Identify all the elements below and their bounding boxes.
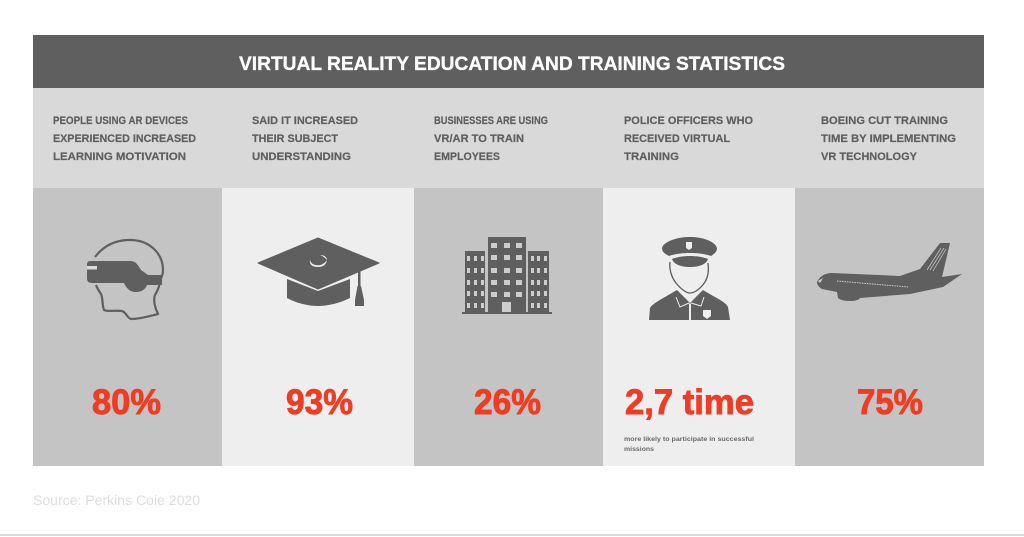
label: police officers: POLICE OFFICERS WHO	[624, 115, 753, 127]
label: businesses: VR/AR TO TRAIN	[434, 133, 524, 145]
label: Boeing: TIME BY IMPLEMENTING	[821, 133, 956, 145]
panel: police officers	[603, 115, 795, 466]
label: Boeing: VR TECHNOLOGY	[821, 151, 918, 163]
value: 2,7 time: 2,7 time	[625, 383, 754, 422]
label: AR devices: EXPERIENCED INCREASED	[53, 133, 196, 145]
title banner: VIRTUAL REALITY EDUCATION AND TRAINING STATISTICS	[239, 54, 785, 75]
note: missions	[624, 446, 654, 453]
label: subject understanding: THEIR SUBJECT	[252, 133, 338, 145]
title banner	[33, 35, 984, 88]
panel: AR devices	[33, 115, 222, 466]
label: businesses: EMPLOYEES	[434, 151, 500, 163]
value: 75%: 75%	[857, 383, 923, 422]
panel: subject understanding	[222, 115, 414, 466]
value: 26%: 26%	[474, 383, 541, 422]
label band	[33, 88, 984, 188]
note: more likely to participate in successful	[624, 436, 754, 443]
icon: office buildings	[462, 237, 552, 314]
value: 80%: 80%	[92, 383, 161, 422]
label: AR devices: PEOPLE USING AR DEVICES	[53, 115, 188, 127]
label: subject understanding: SAID IT INCREASED	[252, 115, 358, 127]
label: Boeing: BOEING CUT TRAINING	[821, 115, 948, 127]
label: police officers: RECEIVED VIRTUAL	[624, 133, 730, 145]
panel: Boeing	[795, 115, 984, 466]
label: subject understanding: UNDERSTANDING	[252, 151, 351, 163]
icon: airplane	[817, 243, 962, 301]
icon: VR headset on head	[87, 240, 163, 319]
label: police officers: TRAINING	[624, 151, 679, 163]
icon: police officer	[649, 237, 730, 320]
label: AR devices: LEARNING MOTIVATION	[53, 151, 186, 163]
icon: graduation cap	[258, 238, 379, 306]
panel: businesses	[414, 115, 603, 466]
source: Source: Perkins Coie 2020	[33, 493, 200, 508]
label: businesses: BUSINESSES ARE USING	[434, 115, 548, 127]
value: 93%: 93%	[286, 383, 353, 422]
